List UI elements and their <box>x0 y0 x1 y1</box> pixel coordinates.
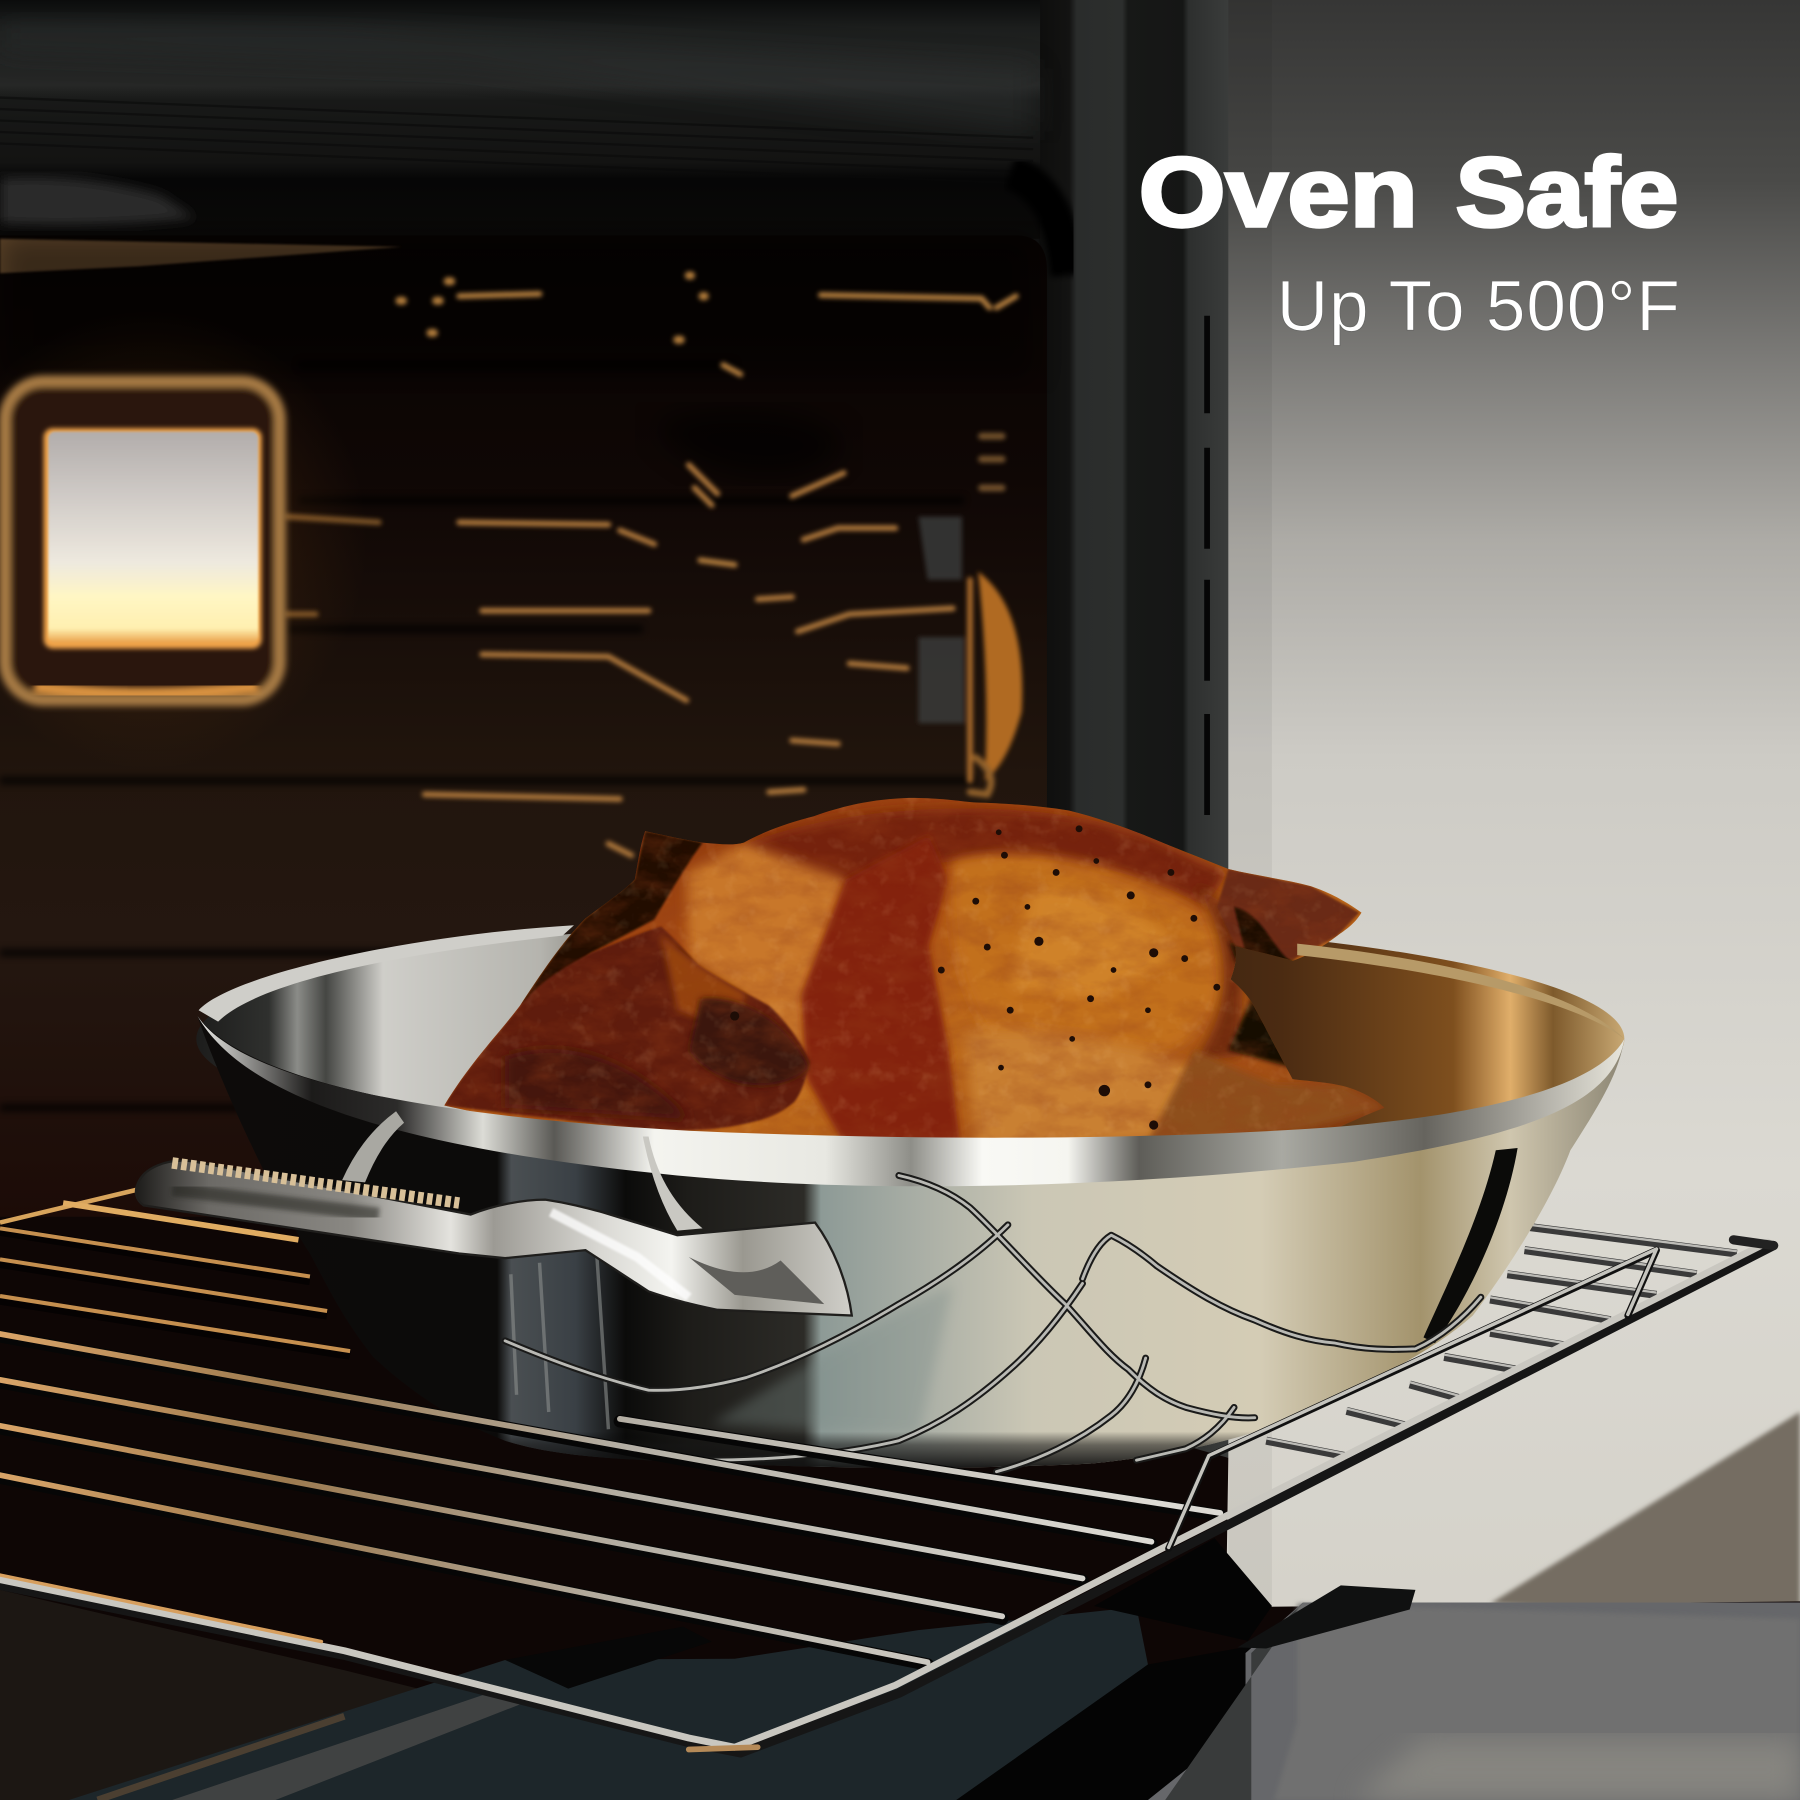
subtitle: temperature limit: Up To 500°F <box>1277 268 1681 347</box>
oven rack front wires <box>0 1240 1774 1753</box>
title: oven safe: Oven <box>1139 137 1418 247</box>
title: oven safe <box>1139 137 1681 347</box>
panel: oven top interior <box>0 0 1068 276</box>
panel: oven cavity <box>0 235 1047 1217</box>
panel: oven front frame <box>1039 0 1272 1607</box>
illustration: rack wires on pan <box>505 1176 1481 1472</box>
icon: oven light <box>0 310 367 769</box>
panel: floor in background <box>1490 1412 1800 1621</box>
illustration: pan handle <box>136 1111 852 1316</box>
panel: amber cavity reflections <box>287 276 1022 855</box>
panel: oven door and counter <box>0 1217 1800 1800</box>
illustration: stainless pan body <box>197 925 1624 1468</box>
illustration: roast chicken <box>436 792 1389 1159</box>
title: oven safe: Safe <box>1456 137 1678 247</box>
oven rack back wires <box>0 1188 1737 1457</box>
panel: pan interior <box>196 920 1624 1158</box>
panel: kitchen wall <box>1217 0 1800 1800</box>
